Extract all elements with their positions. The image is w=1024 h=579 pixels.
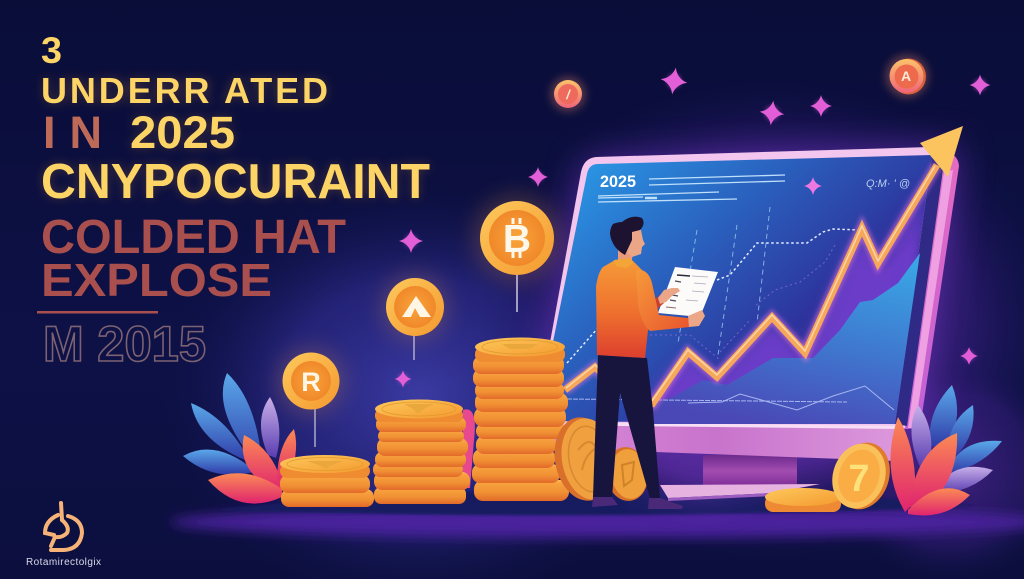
screen top-right label: Q:M· ' @ xyxy=(866,178,910,190)
monitor right bevel xyxy=(893,147,959,430)
pink plant behind middle stack xyxy=(463,409,475,488)
near hand xyxy=(688,310,705,327)
title: number: 3 xyxy=(41,30,62,71)
screen header lines xyxy=(598,175,785,202)
far sleeve xyxy=(654,295,664,309)
logo xyxy=(26,503,101,568)
title: underrated: UNDERR ATED xyxy=(41,70,328,111)
monitor xyxy=(530,145,960,501)
logo wordmark: Rotamirectolgix xyxy=(26,557,101,568)
shoes xyxy=(592,497,683,509)
floating coin: A xyxy=(381,273,449,360)
near arm xyxy=(636,270,690,331)
monitor glow xyxy=(530,145,960,500)
flat coin right xyxy=(765,488,841,512)
torso xyxy=(596,260,652,358)
coin stack small xyxy=(280,455,374,507)
face xyxy=(622,228,645,257)
floating coin: bitcoin: B xyxy=(503,218,531,261)
subtitle: explode: EXPLOSE xyxy=(41,254,272,306)
right plant xyxy=(890,385,1002,515)
coin stack medium xyxy=(373,400,470,504)
dotted trend line xyxy=(567,229,860,363)
title: cryptocurrency: CNYPOCURAINT xyxy=(41,155,430,209)
monitor dark right strip xyxy=(895,155,943,426)
legs xyxy=(593,355,660,498)
monitor frame xyxy=(535,147,945,428)
neck xyxy=(618,248,633,260)
monitor screen xyxy=(537,155,932,424)
chart xyxy=(565,126,963,424)
title: 2025: 2025 xyxy=(130,107,235,158)
collar xyxy=(614,258,633,268)
coin stack tall xyxy=(472,338,569,501)
monitor stand xyxy=(660,455,820,501)
leaning coin right: 7 xyxy=(848,458,870,500)
left plant xyxy=(183,373,296,504)
sparkles xyxy=(394,66,990,388)
logo mark xyxy=(45,503,82,550)
title glow xyxy=(41,70,430,209)
floor xyxy=(170,506,1024,538)
small floating coin right: A xyxy=(901,68,911,84)
small floating coin left xyxy=(550,76,586,112)
screen sparkle xyxy=(804,177,822,195)
far hand xyxy=(658,288,680,304)
small floating coin left: / xyxy=(565,87,571,102)
person xyxy=(592,217,718,509)
area series xyxy=(653,253,920,424)
floating coin: R: R xyxy=(301,367,321,397)
hair xyxy=(610,217,644,255)
title: in: IN xyxy=(43,107,102,158)
floating coin: R xyxy=(277,347,345,447)
floor shadow xyxy=(215,489,975,515)
faint dotted series xyxy=(650,245,835,360)
leaning coins xyxy=(548,413,652,505)
divider line xyxy=(37,311,158,314)
monitor chin xyxy=(535,423,899,461)
rising arrow xyxy=(565,126,963,403)
title glow: CNYPOCURAINT xyxy=(41,155,430,209)
title glow: UNDERR ATED xyxy=(41,70,328,111)
paper xyxy=(658,267,718,317)
title glow: 2025 xyxy=(130,107,235,158)
purple glow under line xyxy=(620,190,925,424)
vertical dashed lines xyxy=(678,207,770,355)
small floating coin right xyxy=(885,54,929,98)
subtitle: could: COLDED HAT xyxy=(41,211,346,264)
title block xyxy=(37,30,430,372)
screen year label: 2025 xyxy=(600,172,636,191)
subtitle: outlined year: M 2015 xyxy=(43,316,206,372)
leaning coin right xyxy=(824,436,898,516)
thin baseline lines xyxy=(567,386,894,410)
floating coin: bitcoin xyxy=(473,194,561,312)
